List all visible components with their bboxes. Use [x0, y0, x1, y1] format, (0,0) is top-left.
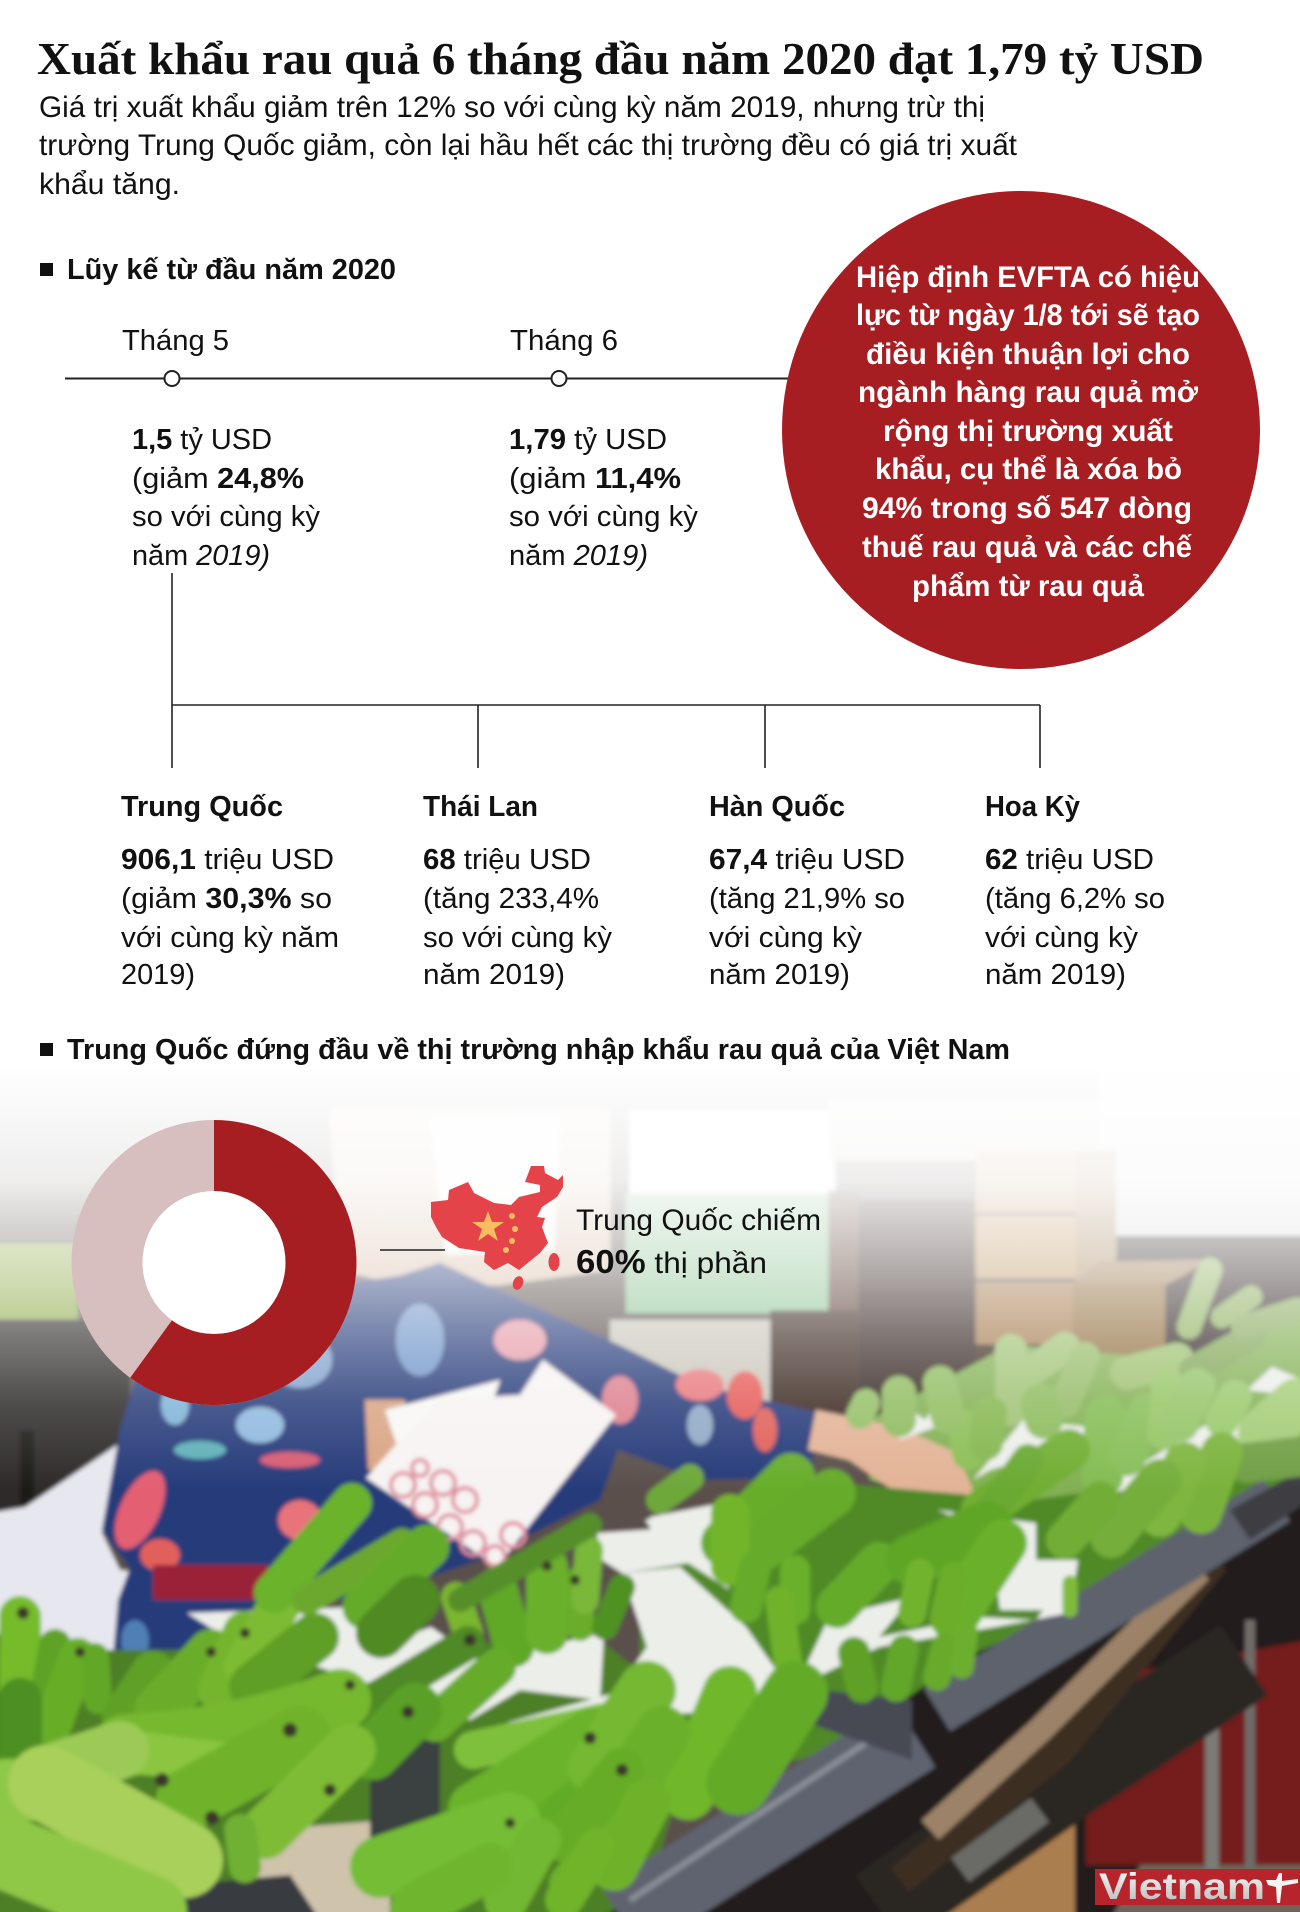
market: Thailand: so với cùng kỳ — [423, 922, 612, 954]
bottom center — [473, 1720, 614, 1750]
market: United States: (tăng 6,2% so — [985, 883, 1165, 915]
subtitle — [39, 91, 1017, 201]
text block: month 5 value: so với cùng kỳ — [132, 501, 320, 533]
market: China: 2019) — [121, 959, 195, 991]
label: month 5: Tháng 5 — [122, 325, 229, 357]
market: United States: Hoa Kỳ — [985, 791, 1080, 823]
text block: month 6 value — [509, 424, 698, 572]
text block: month 5 value: (giảm 24,8% — [132, 463, 304, 495]
title: Xuất khẩu rau quả 6 tháng đầu năm 2020 đạt 1,79 tỷ USD — [37, 33, 1204, 84]
market: China: 906,1 triệu USD — [121, 844, 334, 876]
table and right side — [600, 1500, 1300, 1912]
text block: month 6 value: so với cùng kỳ — [509, 501, 698, 533]
market: Thailand: 68 triệu USD — [423, 844, 591, 876]
upper left bunch — [0, 1617, 41, 1720]
market: United States — [985, 791, 1165, 991]
text block: month 5 value — [132, 424, 320, 572]
banana tips — [17, 1561, 628, 1828]
callout circle: EVFTA: 94% trong số 547 dòng — [862, 492, 1192, 525]
background photo: worker packing green bananas — [0, 1060, 1300, 1912]
subtitle: trường Trung Quốc giảm, còn lại hầu hết các thị trường đều có giá trị xuất — [39, 129, 1017, 162]
text block: month 5 value: 1,5 tỷ USD — [132, 424, 272, 456]
donut segment: China 60% — [130, 1120, 356, 1405]
callout circle: EVFTA: điều kiện thuận lợi cho — [866, 338, 1190, 371]
subtitle: khẩu tăng. — [39, 168, 180, 201]
marker: month 5 — [164, 371, 180, 386]
market: United States: với cùng kỳ — [985, 922, 1139, 954]
center — [497, 1587, 514, 1647]
market: China: Trung Quốc — [121, 791, 283, 823]
market: United States: 62 triệu USD — [985, 844, 1154, 876]
callout circle: EVFTA: lực từ ngày 1/8 tới sẽ tạo — [856, 299, 1200, 332]
label: month 6: Tháng 6 — [510, 325, 618, 357]
icon: China map with star — [431, 1166, 563, 1291]
callout circle: EVFTA: rộng thị trường xuất — [883, 415, 1173, 448]
marker: month 6 — [552, 371, 566, 386]
bananas — [0, 1270, 1297, 1912]
paper liners — [187, 1367, 1300, 1723]
connector: market branches — [172, 573, 1040, 768]
text block: month 6 value: 1,79 tỷ USD — [509, 424, 667, 456]
logo: Vietnam+: Vietnam — [1099, 1866, 1265, 1907]
market: United States: năm 2019) — [985, 959, 1126, 991]
callout circle: EVFTA: ngành hàng rau quả mở — [858, 376, 1198, 409]
callout circle: EVFTA: phẩm từ rau quả — [912, 570, 1145, 603]
section heading: China leads: Trung Quốc đứng đầu về thị trường nhập khẩu rau quả của Việt Nam — [67, 1034, 1010, 1066]
front center right — [725, 1477, 791, 1543]
market: Thailand: Thái Lan — [423, 791, 538, 823]
callout circle: EVFTA: thuế rau quả và các chế — [862, 531, 1193, 564]
leader line — [380, 1249, 445, 1251]
text block: month 6 value: năm 2019) — [509, 540, 648, 572]
market: South Korea: (tăng 21,9% so — [709, 883, 905, 915]
callout circle: EVFTA — [782, 191, 1260, 669]
market: Thailand: (tăng 233,4% — [423, 883, 599, 915]
market: China — [121, 791, 339, 991]
section heading: cumulative: Lũy kế từ đầu năm 2020 — [67, 254, 396, 286]
market: South Korea — [709, 791, 905, 991]
text block: month 5 value: năm 2019) — [132, 540, 270, 572]
market: South Korea: với cùng kỳ — [709, 922, 863, 954]
logo: Vietnam+ — [1095, 1866, 1300, 1907]
market: South Korea: năm 2019) — [709, 959, 850, 991]
market: South Korea: Hàn Quốc — [709, 791, 845, 823]
text block: China market share: Trung Quốc chiếm — [576, 1204, 821, 1237]
market: Thailand — [423, 791, 612, 991]
subtitle: Giá trị xuất khẩu giảm trên 12% so với cùng kỳ năm 2019, nhưng trừ thị — [39, 91, 985, 124]
donut chart: 60% share — [72, 1120, 356, 1405]
text block: China market share: 60% thị phần — [576, 1243, 767, 1280]
market: Thailand: năm 2019) — [423, 959, 565, 991]
market: China: (giảm 30,3% so — [121, 883, 332, 915]
rear right — [995, 1350, 1027, 1410]
text block: China market share — [576, 1204, 821, 1280]
callout circle: EVFTA: Hiệp định EVFTA có hiệu — [856, 261, 1200, 294]
market: China: với cùng kỳ năm — [121, 922, 339, 954]
callout circle: EVFTA: khẩu, cụ thể là xóa bỏ — [875, 453, 1182, 486]
market: South Korea: 67,4 triệu USD — [709, 844, 905, 876]
text block: month 6 value: (giảm 11,4% — [509, 463, 681, 495]
timeline — [65, 325, 790, 386]
